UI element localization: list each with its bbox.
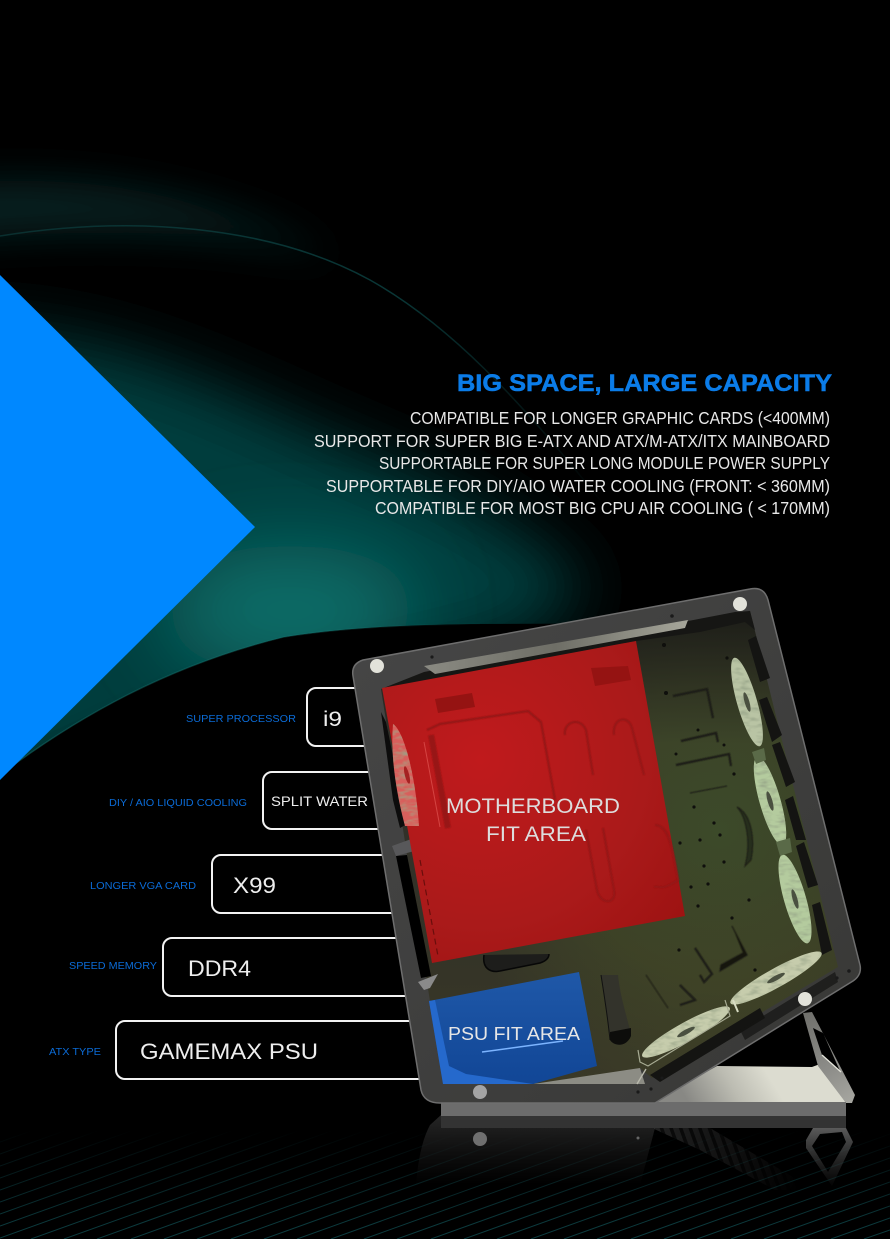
board embossing	[427, 711, 678, 901]
left slots	[381, 712, 438, 990]
spec row: memory	[69, 938, 463, 996]
spec row: vga card	[90, 855, 452, 913]
motherboard label: MOTHERBOARD	[446, 795, 620, 818]
lower ledge	[533, 1068, 645, 1084]
dashed slot line	[420, 860, 438, 956]
panel holes	[662, 643, 757, 972]
feature list	[314, 408, 830, 518]
case frame	[353, 588, 860, 1103]
feature list: SUPPORTABLE FOR SUPER LONG MODULE POWER SUPPLY	[379, 453, 830, 473]
motherboard fit area	[382, 641, 685, 963]
feature list: SUPPORTABLE FOR DIY/AIO WATER COOLING (FRONT: < 360MM)	[326, 476, 830, 496]
spec row: super processor: i9	[323, 708, 342, 731]
fans	[638, 655, 826, 1066]
spec row: super processor	[186, 688, 427, 746]
psu fit area	[429, 972, 597, 1084]
top rail	[424, 620, 688, 674]
background teal swoosh	[0, 170, 603, 764]
spec row: atx type: ATX TYPE	[49, 1047, 101, 1058]
spec row: memory: DDR4	[188, 956, 251, 981]
computer case	[353, 588, 860, 1103]
panel cut-outs	[646, 689, 753, 1008]
spec row: memory: SPEED MEMORY	[69, 961, 157, 972]
spec row: vga card: X99	[233, 873, 276, 898]
feature list: SUPPORT FOR SUPER BIG E-ATX AND ATX/M-ATX/ITX MAINBOARD	[314, 431, 830, 451]
motherboard fit area: FIT AREA	[486, 823, 586, 846]
spec row: liquid cooling: SPLIT WATER	[271, 793, 368, 809]
red tinted left fan	[392, 724, 419, 826]
spec row: liquid cooling	[109, 772, 433, 829]
case interior panel	[381, 611, 838, 1084]
oblong slot	[484, 954, 549, 971]
feature list: COMPATIBLE FOR MOST BIG CPU AIR COOLING ( < 170MM)	[375, 498, 830, 518]
psu fit area: PSU FIT AREA	[448, 1023, 581, 1044]
right frame vents	[650, 636, 838, 1082]
spec row: atx type: GAMEMAX PSU	[140, 1039, 318, 1064]
stand	[441, 1012, 855, 1116]
spec row: atx type	[49, 1021, 466, 1079]
blue triangle	[0, 275, 255, 780]
title: BIG SPACE, LARGE CAPACITY	[457, 370, 832, 397]
feature list: COMPATIBLE FOR LONGER GRAPHIC CARDS (<400MM)	[410, 408, 830, 428]
spec row: vga card: LONGER VGA CARD	[90, 881, 196, 892]
lower vertical slot	[601, 975, 631, 1045]
floor line pattern	[0, 1143, 890, 1239]
spec row: super processor: SUPER PROCESSOR	[186, 714, 296, 725]
spec row: liquid cooling: DIY / AIO LIQUID COOLING	[109, 798, 247, 809]
frame screws	[370, 597, 851, 1099]
reflection of case and stand	[418, 1115, 853, 1182]
